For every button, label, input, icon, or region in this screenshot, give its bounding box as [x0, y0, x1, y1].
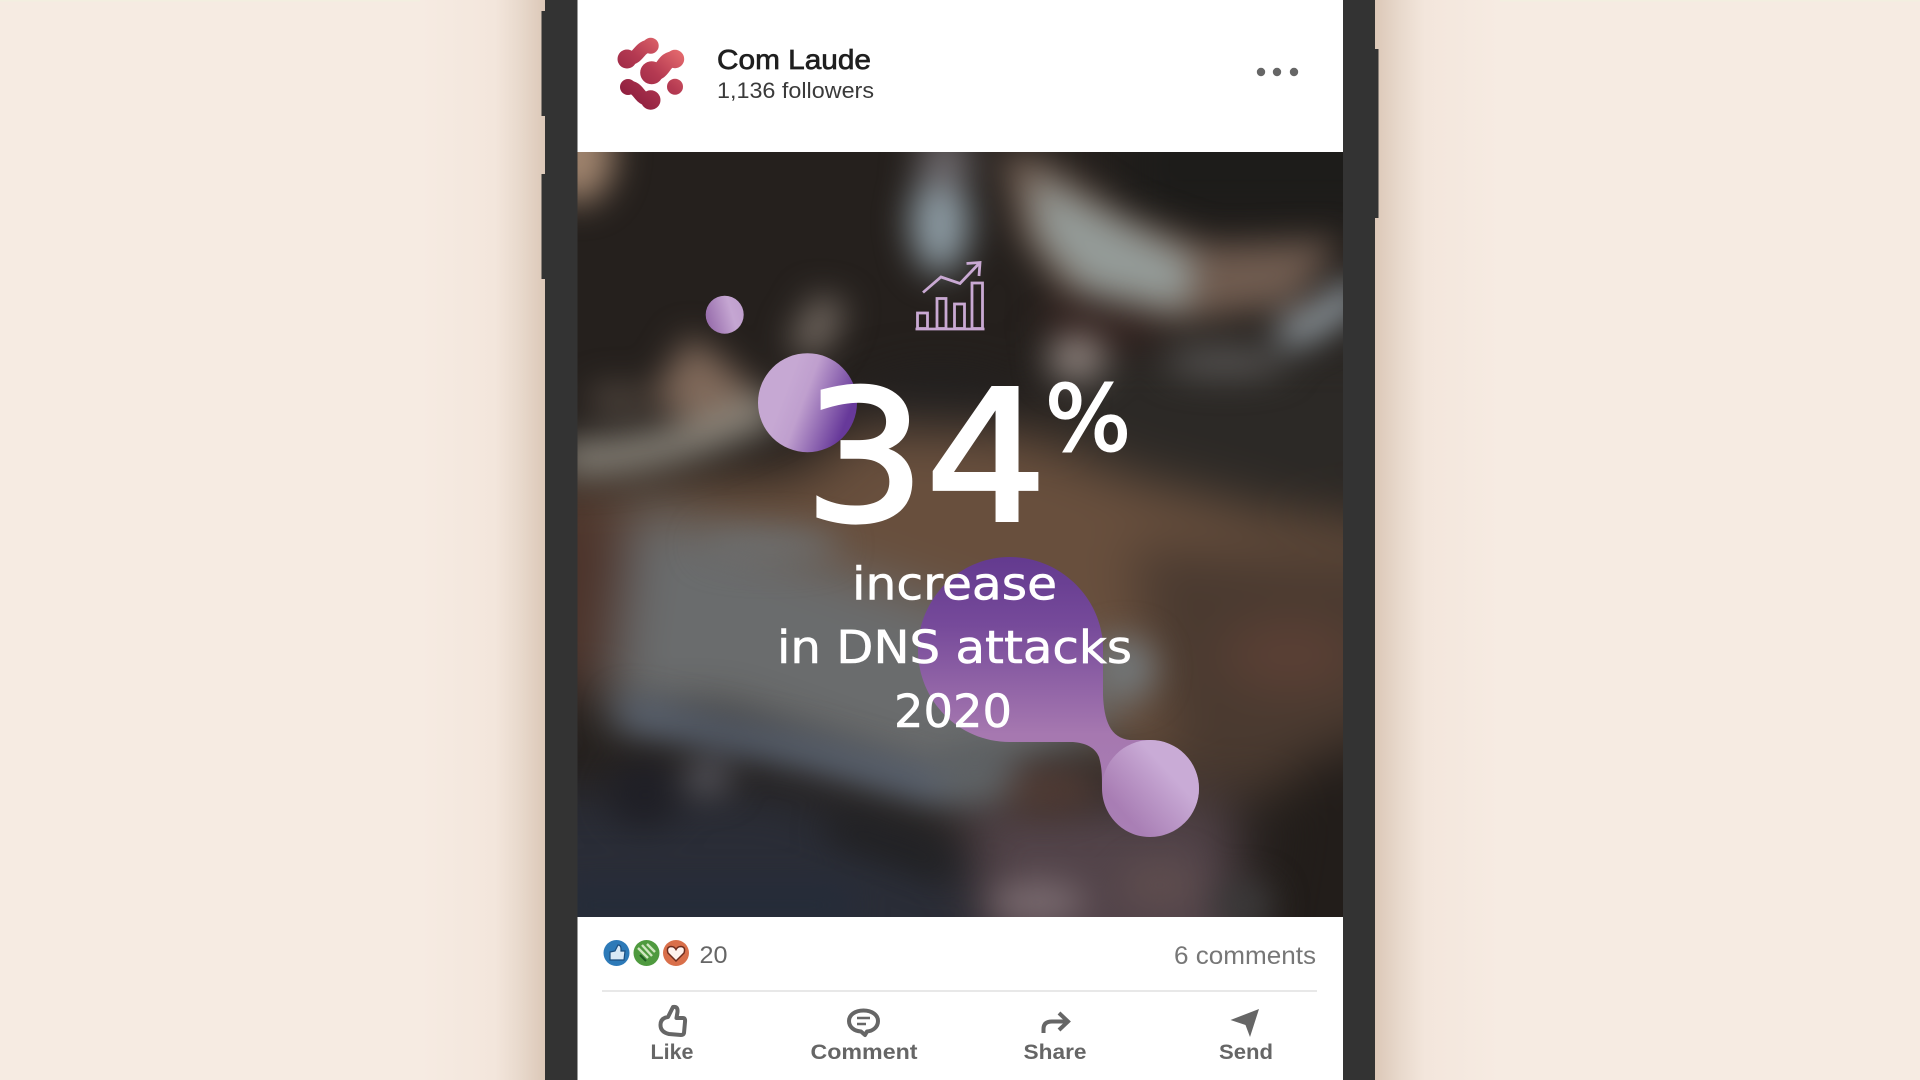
statistic caption [777, 558, 1132, 738]
comment count: 6 comments [1174, 942, 1316, 970]
icon: share button [1044, 1013, 1068, 1033]
icon: like reaction [604, 940, 630, 966]
icon: like button [660, 1007, 685, 1035]
follower count: 1,136 followers [717, 78, 874, 103]
icon: clap reaction [634, 940, 660, 966]
icon: medium purple circle [758, 353, 857, 452]
percent sign: % [1045, 367, 1131, 472]
icon: comment button [849, 1010, 878, 1035]
icon: love reaction [663, 940, 689, 966]
icon: more menu [1257, 68, 1298, 76]
like label: Like [650, 1041, 694, 1064]
phone frame [542, 0, 1378, 1080]
panel: blurred photo [578, 152, 1343, 917]
icon: small purple circle [706, 296, 744, 334]
icon: purple blob [918, 557, 1199, 837]
share label: Share [1024, 1041, 1086, 1064]
icon: rising bar chart [916, 262, 984, 329]
account name: Com Laude [717, 44, 871, 75]
reaction count: 20 [700, 942, 728, 969]
send label: Send [1219, 1041, 1273, 1064]
icon: send button [1230, 1009, 1259, 1037]
statistic caption: increase [852, 558, 1057, 610]
statistic caption: 2020 [894, 685, 1012, 738]
icon: Com Laude logo [618, 38, 684, 110]
panel: post header [618, 38, 1298, 110]
comment label: Comment [810, 1041, 918, 1064]
panel: engagement footer [602, 940, 1317, 1064]
statistic caption: in DNS attacks [777, 621, 1132, 674]
headline: 34: 34 [804, 352, 1047, 563]
